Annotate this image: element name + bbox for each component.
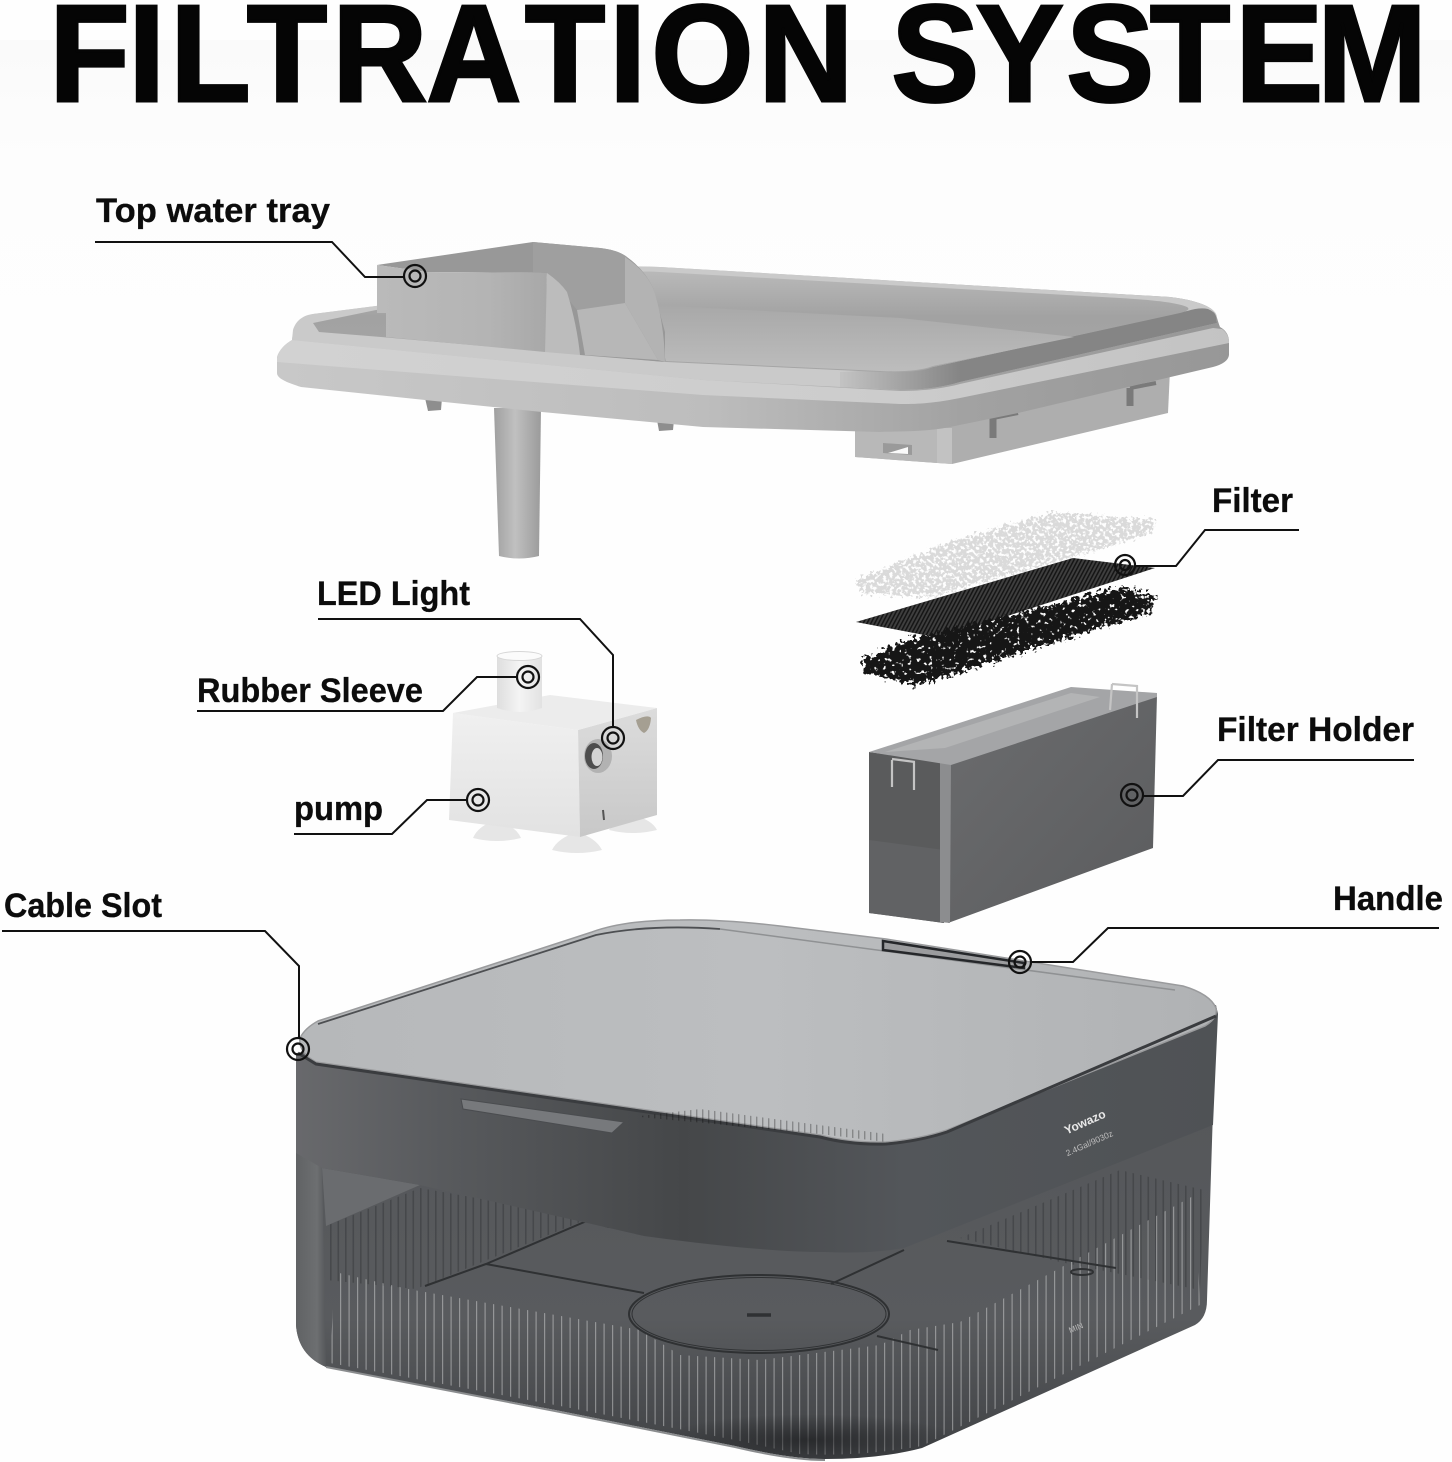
mesh filter sheet	[856, 558, 1155, 638]
brand label	[1055, 1107, 1116, 1158]
tank top inner line	[318, 927, 720, 1024]
tray basin floor	[650, 305, 1074, 371]
callout: Handle	[1009, 880, 1443, 973]
callout: Cable Slot	[2, 887, 309, 1060]
callout: Filter Holder	[1121, 711, 1414, 806]
tower front wall	[377, 265, 547, 352]
callout: Rubber Sleeve: Rubber Sleeve	[197, 672, 423, 710]
pump right face	[578, 708, 657, 837]
tank bottom shadow	[697, 1417, 936, 1459]
tray lip shadow on right	[840, 308, 1217, 390]
callout: LED Light	[317, 575, 624, 749]
tank top face	[300, 920, 1216, 1142]
holder left face	[869, 752, 948, 923]
MIN mark: MIN	[1068, 1321, 1085, 1335]
callout: Top water tray: Top water tray	[96, 192, 330, 230]
callout: LED Light: LED Light	[317, 575, 470, 613]
pump	[449, 652, 657, 853]
rear handle	[883, 941, 1024, 968]
callout: Top water tray	[95, 192, 426, 287]
brand label: Yowazo	[1062, 1107, 1108, 1137]
tank back-left light wall	[322, 1168, 420, 1226]
callout: Filter: Filter	[1212, 482, 1293, 520]
callout: Filter	[1115, 482, 1299, 575]
tank ribs: front wall	[330, 1195, 1200, 1455]
holder corner highlight	[940, 762, 951, 923]
callout: Handle: Handle	[1333, 880, 1443, 918]
tank top rear faint line	[720, 929, 1175, 990]
pump slot	[636, 716, 651, 733]
tank bottom edges	[326, 1367, 825, 1460]
pump small hole	[603, 810, 604, 820]
pump spout	[497, 657, 542, 712]
inner grid of ribs	[640, 1109, 886, 1142]
tank base plate lines	[425, 1220, 1116, 1353]
pump left face	[449, 713, 580, 837]
front handle	[461, 1099, 624, 1133]
tray drain pipe	[494, 408, 541, 558]
pump suction feet	[473, 815, 657, 853]
filter stack	[856, 513, 1157, 685]
tank ribs: back right	[960, 1170, 1204, 1290]
tray rear bracket	[855, 370, 1170, 464]
tray tower	[377, 242, 665, 362]
tray pegs	[425, 398, 674, 431]
holder top	[869, 687, 1157, 765]
tower interior	[377, 242, 665, 362]
brand label: 2.4Gal/9030z	[1064, 1128, 1114, 1158]
callout: pump: pump	[294, 790, 383, 828]
tank ribs: back left	[326, 1188, 590, 1289]
callout: Filter Holder: Filter Holder	[1217, 711, 1414, 749]
tray flange top band	[277, 328, 1229, 404]
pump top	[453, 695, 657, 730]
top water tray	[277, 242, 1229, 558]
tray basin wall	[313, 272, 1188, 372]
callout: Rubber Sleeve	[197, 666, 539, 711]
holder right face	[948, 695, 1157, 923]
tower side fin	[545, 273, 580, 355]
tank upper band	[296, 1005, 1218, 1252]
pump screw terminal	[584, 739, 612, 773]
tank left corner light strip	[296, 1150, 326, 1367]
tower ramp	[577, 303, 658, 360]
callout: pump	[294, 789, 489, 834]
tray flange side	[277, 266, 1229, 432]
filter holder	[869, 684, 1157, 923]
tower right fin	[625, 257, 665, 362]
holder clips	[892, 684, 1137, 790]
callout: Cable Slot: Cable Slot	[4, 887, 162, 925]
water tank base	[296, 920, 1218, 1462]
tank front rim shadow	[298, 1016, 1216, 1144]
tank lower body	[296, 1110, 1213, 1459]
black filter granules	[861, 587, 1157, 685]
tray lip	[292, 267, 1217, 390]
white filter granules	[856, 513, 1157, 597]
tank drain circle	[629, 1275, 889, 1353]
